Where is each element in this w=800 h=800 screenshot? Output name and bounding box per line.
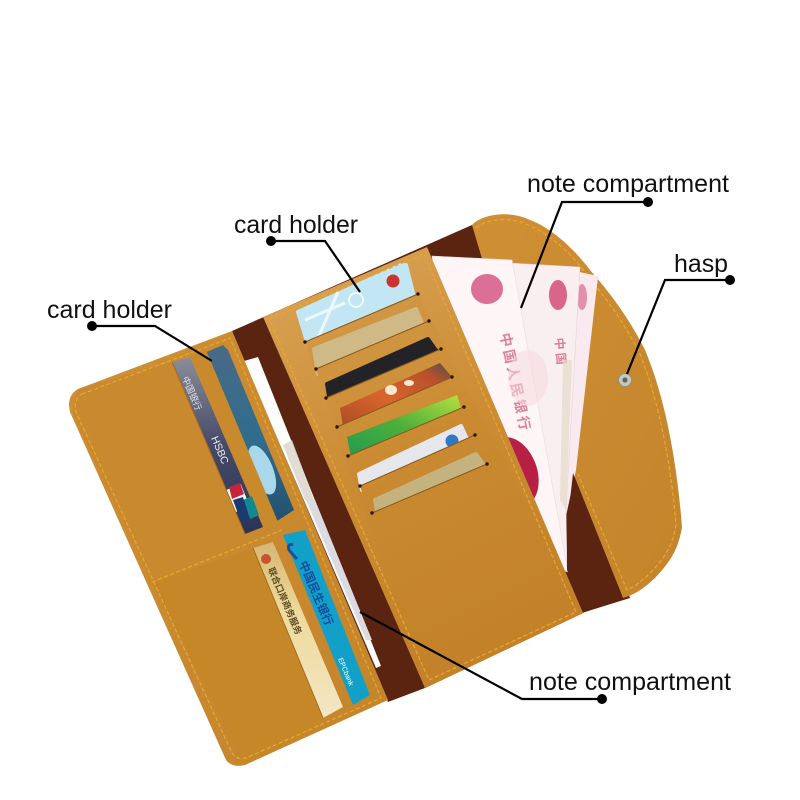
callout: note compartment top: note compartment — [527, 170, 729, 198]
card 2 tan — [314, 309, 426, 374]
lower pocket — [152, 548, 326, 765]
leather strip between cards — [190, 350, 278, 529]
lower cards: 中国民生银行 — [296, 559, 336, 628]
card: grey HSBC: HSBC — [208, 434, 231, 466]
callout: note compartment bottom: note compartment — [529, 668, 731, 696]
wallet — [69, 214, 682, 766]
panel: left card holder — [69, 331, 388, 766]
card 4 orange — [340, 363, 454, 432]
upper pocket — [72, 362, 250, 583]
flap stitching — [476, 220, 676, 590]
pocket 5 — [348, 407, 583, 688]
pocket edges — [305, 294, 487, 513]
callout: card holder left — [47, 296, 212, 361]
card: blue ICBC — [204, 345, 294, 521]
card 6 white — [359, 426, 470, 490]
pocket 6 — [360, 435, 583, 688]
pocket 2 — [316, 321, 583, 688]
pocket 1 — [305, 294, 583, 688]
lower brown lining on top of notes edge — [567, 473, 623, 612]
flap with snap closure side — [472, 214, 682, 598]
inner brown lining — [232, 225, 630, 702]
horizontal pocket seam — [152, 530, 282, 582]
banknotes: 中国 — [552, 337, 570, 368]
card 3 black — [327, 339, 438, 402]
left stitching — [75, 338, 381, 758]
callout: hasp: hasp — [674, 250, 728, 278]
card: grey HSBC: 中国银行 — [180, 374, 204, 412]
white note behind left panel — [244, 357, 381, 668]
pocket 4 — [337, 377, 583, 688]
lower cards — [253, 530, 370, 718]
middle stitching — [269, 254, 576, 680]
callout: card holder left: card holder — [47, 296, 172, 324]
callout: card holder top: card holder — [234, 211, 358, 239]
callout: note compartment bottom — [360, 612, 731, 704]
note portrait medallion — [471, 274, 503, 304]
front pocket — [372, 464, 583, 688]
hasp snap button — [618, 374, 632, 386]
callout: note compartment top — [521, 170, 729, 308]
note lettering: 中国人民银行 — [497, 331, 534, 434]
middle leather base — [263, 247, 583, 688]
card 1 light blue — [298, 265, 414, 345]
stitch holes — [303, 292, 489, 515]
callout: card holder top — [234, 211, 360, 292]
lower cards: 联合口岸商务服务 — [266, 565, 304, 636]
lower cards: EPCbank — [336, 657, 354, 687]
left leather base — [69, 331, 388, 766]
card 7 tan — [375, 454, 486, 517]
card: blue ICBC: 中国工商银行 — [209, 398, 248, 464]
card 5 green — [347, 395, 463, 462]
panel: middle card holder — [263, 247, 583, 688]
banknotes — [432, 256, 598, 572]
callout: hasp — [627, 250, 735, 374]
card: grey HSBC — [172, 357, 263, 534]
pocket 3 — [326, 349, 583, 688]
